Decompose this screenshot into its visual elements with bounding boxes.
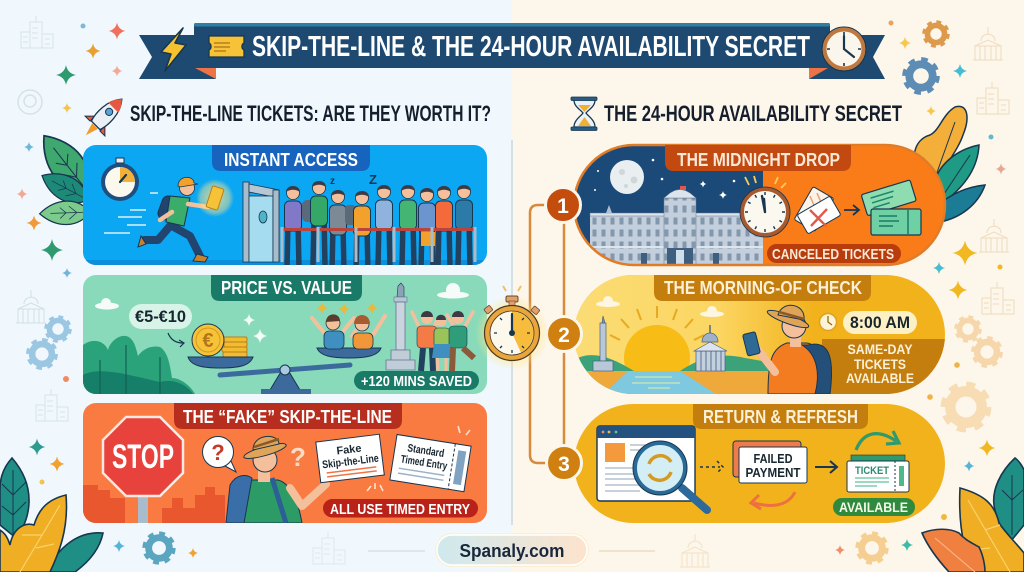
center divider and timeline connector: [511, 140, 564, 525]
sun: [610, 306, 704, 371]
price bubble: [129, 304, 192, 347]
icon: rocket: [76, 89, 132, 145]
ribbon tail right: [809, 35, 885, 79]
curved green arrow: [856, 431, 899, 450]
queue barrier: [282, 227, 475, 262]
ribbon fold left: [195, 68, 216, 79]
running tourist: [104, 177, 208, 262]
ribbon tail left: [139, 35, 216, 79]
same-day tickets text: [846, 341, 914, 386]
tab heading: RETURN & REFRESH: [703, 407, 858, 427]
icon: ticket: [209, 36, 244, 57]
icon: euro coin and stack: [192, 324, 247, 357]
same-day tickets text: TICKETS: [854, 356, 906, 372]
darker info block: [822, 339, 947, 395]
background: right half: [512, 0, 1024, 572]
icon: canceled tickets: [794, 187, 841, 234]
icon: green tickets: [861, 180, 921, 235]
available ticket: TICKET: [855, 465, 889, 477]
icon: lightning bolt: [161, 28, 186, 71]
browser window: [597, 426, 695, 501]
decorations: leaves behind first panel: [31, 126, 101, 225]
tab heading: [654, 275, 871, 301]
panel: the midnight drop: [574, 145, 945, 265]
spark lines: [745, 176, 786, 188]
footer pill: Spanaly.com: [435, 533, 589, 567]
spark lines: [367, 426, 470, 491]
central stopwatch: [475, 286, 549, 370]
monument: [593, 316, 613, 371]
fake ticket: Fake: [336, 443, 362, 458]
icon: stop sign: [103, 417, 183, 525]
price bubble: €5-€10: [135, 307, 186, 326]
callout: canceled tickets: CANCELED TICKETS: [772, 246, 894, 263]
tourist with phone: [743, 305, 832, 394]
icon: midnight clock: [740, 187, 790, 237]
time pill: 8:00 AM: [850, 313, 910, 332]
tab heading: THE MIDNIGHT DROP: [677, 150, 840, 170]
decorations: top left: [16, 16, 126, 261]
dotted arrow: [700, 461, 723, 473]
footer pill: Spanaly.com: Spanaly.com: [460, 540, 564, 561]
monument column: [386, 283, 415, 370]
step badge 1: 1: [557, 195, 569, 218]
ribbon fold right: [809, 68, 828, 79]
panel: instant access: [83, 145, 487, 274]
step badge 2: [546, 316, 582, 352]
clouds: [95, 283, 469, 310]
queue of tired people: [284, 175, 473, 265]
moon and stars: [594, 159, 735, 199]
palace illustration: [590, 190, 763, 265]
sparkles: [243, 302, 378, 343]
title banner: [139, 23, 885, 79]
panel: fake skip-the-line: [83, 403, 487, 525]
callout: all use timed entry: ALL USE TIMED ENTRY: [330, 501, 470, 518]
happy couple on scale: [312, 314, 385, 349]
icon: stopwatch: [101, 158, 139, 201]
failed payment ticket: [733, 441, 807, 483]
same-day tickets text: AVAILABLE: [846, 370, 914, 386]
left heading with rocket icon: [76, 89, 491, 145]
tab heading: THE MORNING-OF CHECK: [664, 278, 862, 298]
step badge 1: [546, 188, 580, 222]
confused tourist: [226, 436, 326, 523]
icon: small clock: [820, 314, 836, 330]
magnifying glass with refresh arrows: [633, 441, 707, 510]
same-day tickets text: SAME-DAY: [848, 341, 913, 357]
decorations: bottom left: [0, 268, 425, 572]
icon: question bubble: ?: [211, 440, 225, 465]
tab heading: [212, 145, 370, 171]
step badge 3: 3: [558, 453, 570, 476]
step badge 3: [546, 446, 582, 480]
standard ticket: Timed Entry: [400, 453, 449, 473]
icon: hourglass: [571, 97, 597, 130]
panel: price vs value: [83, 275, 487, 395]
queue of tired people: Z: [369, 172, 377, 187]
callout: minutes saved: +120 MINS SAVED: [361, 373, 472, 390]
panel: return and refresh: [574, 404, 945, 523]
tab heading: [693, 404, 868, 429]
tab heading: [174, 403, 402, 429]
curved return arrow: [751, 492, 795, 509]
banner body: [194, 23, 830, 68]
fake ticket: [316, 434, 384, 483]
tab heading: THE “FAKE” SKIP-THE-LINE: [183, 407, 392, 427]
panel: the morning-of check: [574, 275, 947, 395]
standard ticket: Standard: [407, 442, 445, 460]
trees: [83, 336, 195, 394]
decorations: bottom right: [599, 280, 1024, 572]
right heading with hourglass icon: [571, 97, 902, 130]
icon: clock: [822, 27, 866, 71]
tab heading: [211, 275, 362, 301]
failed payment ticket: PAYMENT: [746, 465, 801, 480]
tab heading: PRICE VS. VALUE: [221, 278, 352, 298]
heading text: SKIP-THE-LINE TICKETS: ARE THEY WORTH IT?: [130, 101, 491, 126]
river: [604, 371, 716, 394]
queue of tired people: z: [330, 176, 335, 187]
hills and riverbank: [578, 355, 769, 394]
tab heading: INSTANT ACCESS: [224, 150, 358, 170]
confused tourist: ?: [290, 442, 306, 472]
tab heading: [665, 145, 851, 171]
standard ticket: [390, 434, 471, 492]
balance scale: [188, 348, 381, 395]
background: left half: [0, 0, 512, 572]
domed building: [694, 325, 727, 371]
decorations: top right: [888, 20, 1009, 274]
failed payment ticket: FAILED: [754, 451, 792, 466]
arrow: [844, 205, 859, 215]
fake ticket: Skip-the-Line: [321, 453, 380, 471]
gate: [243, 182, 279, 262]
arrow: [815, 461, 837, 473]
icon: stop sign: STOP: [112, 438, 174, 476]
icon: euro coin and stack: €: [202, 330, 214, 352]
decorations: leaves behind first right panel: [914, 106, 985, 222]
step badge 2: 2: [558, 324, 570, 347]
heading text: THE 24-HOUR AVAILABILITY SECRET: [604, 101, 902, 126]
icon: question bubble: [202, 436, 236, 472]
callout: available: AVAILABLE: [839, 499, 908, 515]
clouds: [596, 296, 724, 317]
title text: SKIP-THE-LINE & THE 24-HOUR AVAILABILITY SECRET: [252, 31, 810, 63]
icon: glowing ticket: [196, 179, 234, 217]
available ticket: [847, 455, 909, 492]
skyline silhouette: [83, 485, 225, 523]
cheering group: [412, 311, 474, 371]
